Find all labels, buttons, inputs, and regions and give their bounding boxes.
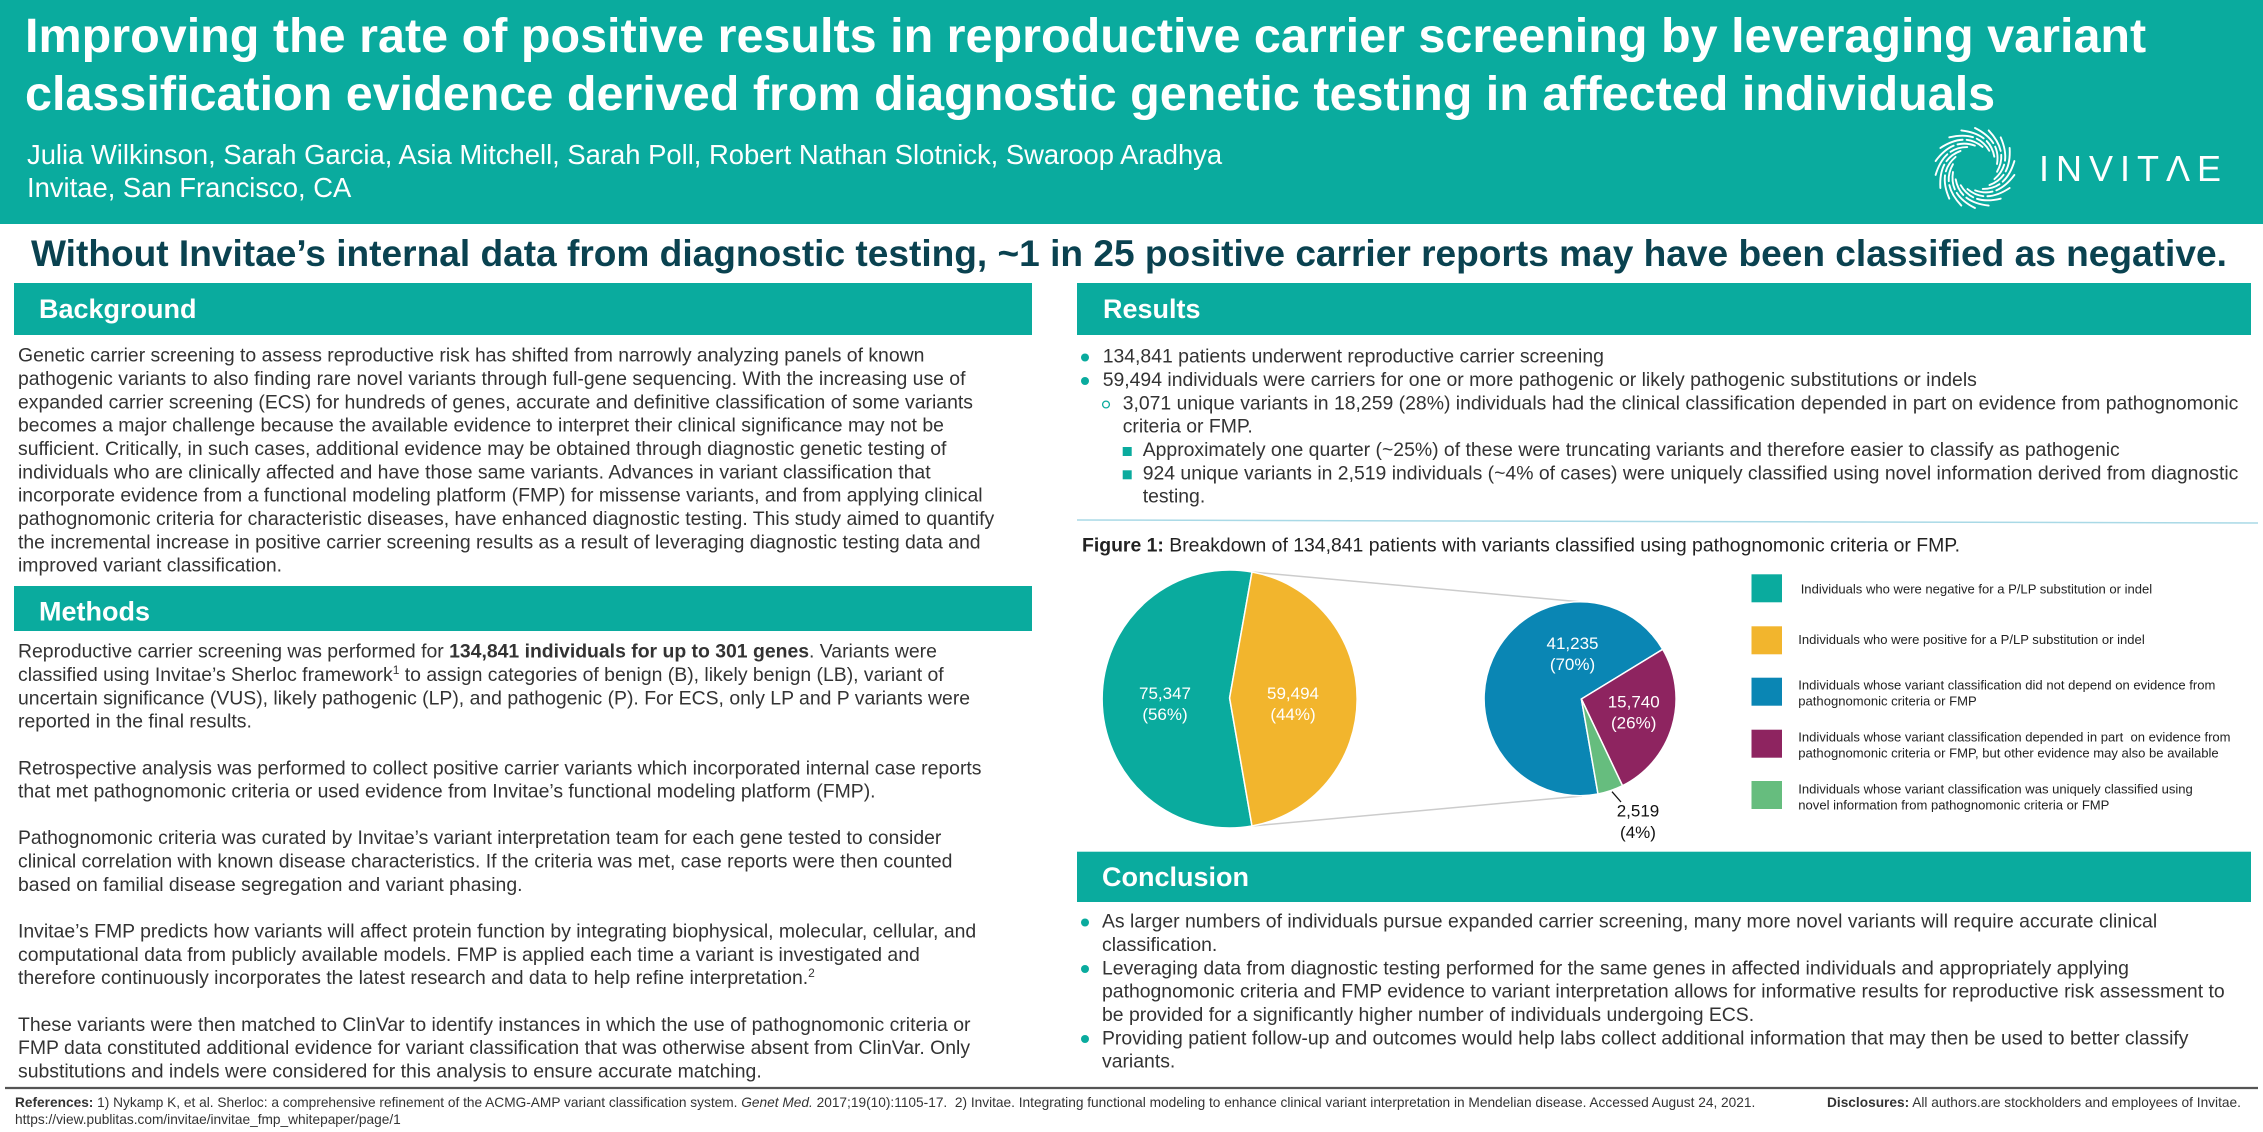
methods text: Retrospective analysis was performed to collect positive carrier variants which incorporated internal case reports <box>18 757 982 779</box>
conclusion bullets: variants. <box>1102 1051 1175 1073</box>
authors and affiliation: Invitae, San Francisco, CA <box>27 172 352 203</box>
heading: background <box>14 283 1032 335</box>
pie labels: (4%) <box>1620 823 1656 842</box>
results bullets: 59,494 individuals were carriers for one or more pathogenic or likely pathogenic substitutions or indels <box>1103 369 1977 391</box>
pie labels: 75,347 <box>1139 684 1191 703</box>
pie labels: (26%) <box>1611 714 1656 733</box>
background text: individuals who are clinically affected and have those same variants. Advances in variant classification that <box>18 461 931 483</box>
big pie <box>1102 570 1357 828</box>
results bullets: 3,071 unique variants in 18,259 (28%) individuals had the clinical classification depended in part on evidence from pathognomonic <box>1123 392 2239 414</box>
conclusion bullets: classification. <box>1102 934 1217 956</box>
legend: Individuals whose variant classification was uniquely classified using <box>1798 782 2193 797</box>
background text <box>18 345 994 577</box>
legend: Individuals whose variant classification did not depend on evidence from <box>1798 677 2215 692</box>
results bullets: 134,841 patients underwent reproductive carrier screening <box>1103 346 1604 368</box>
logo: Invitae <box>1929 123 2221 213</box>
conclusion bullets <box>1081 911 2225 1073</box>
heading: background: Background <box>39 294 197 324</box>
pie labels: 15,740 <box>1608 693 1660 712</box>
pie labels: 2,519 <box>1617 802 1659 821</box>
background text: improved variant classification. <box>18 555 282 577</box>
methods text: Reproductive carrier screening was performed for 134,841 individuals for up to 301 genes. Variants were <box>18 641 937 663</box>
references: References: 1) Nykamp K, et al. Sherloc: a comprehensive refinement of the ACMG-AMP variant classification system. Genet Med. 2017;19(10):1105-17. 2) Invitae. Integrating functional modeling to enhance clinical variant interpretation in Mendelian disease. Accessed August 24, 2021. <box>15 1095 1755 1110</box>
legend <box>1752 574 2231 812</box>
methods text: Invitae’s FMP predicts how variants will affect protein function by integrating biophysical, molecular, cellular, and <box>18 920 976 942</box>
conclusion bullets: pathognomonic criteria and FMP evidence to variant interpretation allows for informative results for reproductive risk assessment to <box>1102 981 2225 1003</box>
legend: novel information from pathognomonic criteria or FMP <box>1798 797 2110 812</box>
pie labels: (70%) <box>1550 655 1595 674</box>
authors and affiliation: Julia Wilkinson, Sarah Garcia, Asia Mitchell, Sarah Poll, Robert Nathan Slotnick, Swaroop Aradhya <box>27 139 1223 170</box>
conclusion bullets: Leveraging data from diagnostic testing performed for the same genes in affected individuals and appropriately applying <box>1102 957 2129 979</box>
methods text: to assign categories of benign (B), likely benign (LB), variant of <box>399 664 944 686</box>
panel: results <box>1077 283 2251 508</box>
figure caption: Figure 1: Breakdown of 134,841 patients with variants classified using pathognomonic criteria or FMP. <box>1082 535 1960 557</box>
results bullets: 924 unique variants in 2,519 individuals (~4% of cases) were uniquely classified using novel information derived from diagnostic <box>1143 462 2239 484</box>
methods text: classified using Invitae’s Sherloc framework <box>18 664 393 686</box>
background text: pathognomonic criteria for characteristic diseases, have enhanced diagnostic testing. This study aimed to quantify <box>18 508 994 530</box>
methods text: therefore continuously incorporates the latest research and data to help refine interpretation. <box>18 967 808 989</box>
methods text: 2 <box>808 966 815 980</box>
small pie <box>1484 602 1676 796</box>
background text: pathogenic variants to also finding rare novel variants through full-gene sequencing. With the increasing use of <box>18 368 966 390</box>
authors and affiliation <box>27 139 1223 203</box>
legend: pathognomonic criteria or FMP, but other evidence may also be available <box>1798 746 2219 761</box>
pie labels: (44%) <box>1270 705 1316 724</box>
legend: Individuals who were positive for a P/LP substitution or indel <box>1798 632 2145 647</box>
methods text: that met pathognomonic criteria or used evidence from Invitae’s functional modeling platform (FMP). <box>18 781 876 803</box>
background text: expanded carrier screening (ECS) for hundreds of genes, accurate and definitive classification of some variants <box>18 391 973 413</box>
legend: Individuals who were negative for a P/LP substitution or indel <box>1801 581 2152 596</box>
background text: incorporate evidence from a functional modeling platform (FMP) for missense variants, and from applying clinical <box>18 485 983 507</box>
methods text: Pathognomonic criteria was curated by Invitae’s variant interpretation team for each gene tested to consider <box>18 827 942 849</box>
methods text: reported in the final results. <box>18 711 252 733</box>
background text: Genetic carrier screening to assess reproductive risk has shifted from narrowly analyzing panels of known <box>18 345 924 367</box>
methods text: uncertain significance (VUS), likely pathogenic (LP), and pathogenic (P). For ECS, only LP and P variants were <box>18 687 970 709</box>
legend: pathognomonic criteria or FMP <box>1798 693 1977 708</box>
panel: methods <box>14 586 1032 1082</box>
results bullets <box>1081 346 2239 508</box>
key message: Without Invitae’s internal data from diagnostic testing, ~1 in 25 positive carrier reports may have been classified as negative. <box>31 232 2227 274</box>
methods text <box>18 641 982 1082</box>
pie labels: (56%) <box>1142 705 1188 724</box>
background text: the incremental increase in positive carrier screening results as a result of leveraging diagnostic testing data and <box>18 531 981 553</box>
conclusion bullets: As larger numbers of individuals pursue expanded carrier screening, many more novel variants will require accurate clinical <box>1102 911 2157 933</box>
methods text: FMP data constituted additional evidence for variant classification that was otherwise absent from ClinVar. Only <box>18 1037 970 1059</box>
results bullets: testing. <box>1143 486 1205 508</box>
heading: conclusion: Conclusion <box>1102 862 1249 892</box>
title: Improving the rate of positive results in reproductive carrier screening by leveraging variant <box>25 9 2146 63</box>
panel: background <box>14 283 1032 577</box>
methods text: These variants were then matched to ClinVar to identify instances in which the use of pathognomonic criteria or <box>18 1014 971 1036</box>
methods text: computational data from publicly available models. FMP is applied each time a variant is investigated and <box>18 944 920 966</box>
heading: conclusion <box>1077 852 2251 902</box>
heading: methods: Methods <box>39 597 150 627</box>
conclusion bullets: Providing patient follow-up and outcomes would help labs collect additional information that may then be used to better classify <box>1102 1027 2189 1049</box>
background text: sufficient. Critically, in such cases, additional evidence may be obtained through diagnostic genetic testing of <box>18 438 947 460</box>
methods text: clinical correlation with known disease characteristics. If the criteria was met, case reports were then counted <box>18 851 952 873</box>
heading: results: Results <box>1103 294 1201 324</box>
conclusion bullets: be provided for a significantly higher number of individuals undergoing ECS. <box>1102 1004 1754 1026</box>
pie labels <box>1139 634 1660 842</box>
disclosures: Disclosures: All authors.are stockholders and employees of Invitae. <box>1827 1095 2241 1110</box>
title <box>25 9 2146 121</box>
pie labels: 59,494 <box>1267 684 1319 703</box>
references: https://view.publitas.com/invitae/invitae_fmp_whitepaper/page/1 <box>15 1112 401 1127</box>
references <box>15 1095 1755 1127</box>
title: classification evidence derived from diagnostic genetic testing in affected individuals <box>25 67 1995 121</box>
methods text: substitutions and indels were considered for this analysis to ensure accurate matching. <box>18 1060 762 1082</box>
chart: pie of pie <box>1102 570 1676 842</box>
legend: Individuals whose variant classification depended in part on evidence from <box>1798 730 2231 745</box>
background text: becomes a major challenge because the available evidence to interpret their clinical significance may not be <box>18 415 944 437</box>
methods text: based on familial disease segregation and variant phasing. <box>18 874 522 896</box>
heading: methods <box>14 586 1032 631</box>
results bullets: criteria or FMP. <box>1123 416 1253 438</box>
logo: Invitae: INVITΛE <box>2039 148 2221 189</box>
results bullets: Approximately one quarter (~25%) of these were truncating variants and therefore easier to classify as pathogenic <box>1143 439 2120 461</box>
panel: conclusion <box>1077 852 2251 1073</box>
methods text: 1 <box>393 663 400 677</box>
header banner <box>0 0 2263 224</box>
heading: results <box>1077 283 2251 335</box>
pie labels: 41,235 <box>1546 634 1598 653</box>
